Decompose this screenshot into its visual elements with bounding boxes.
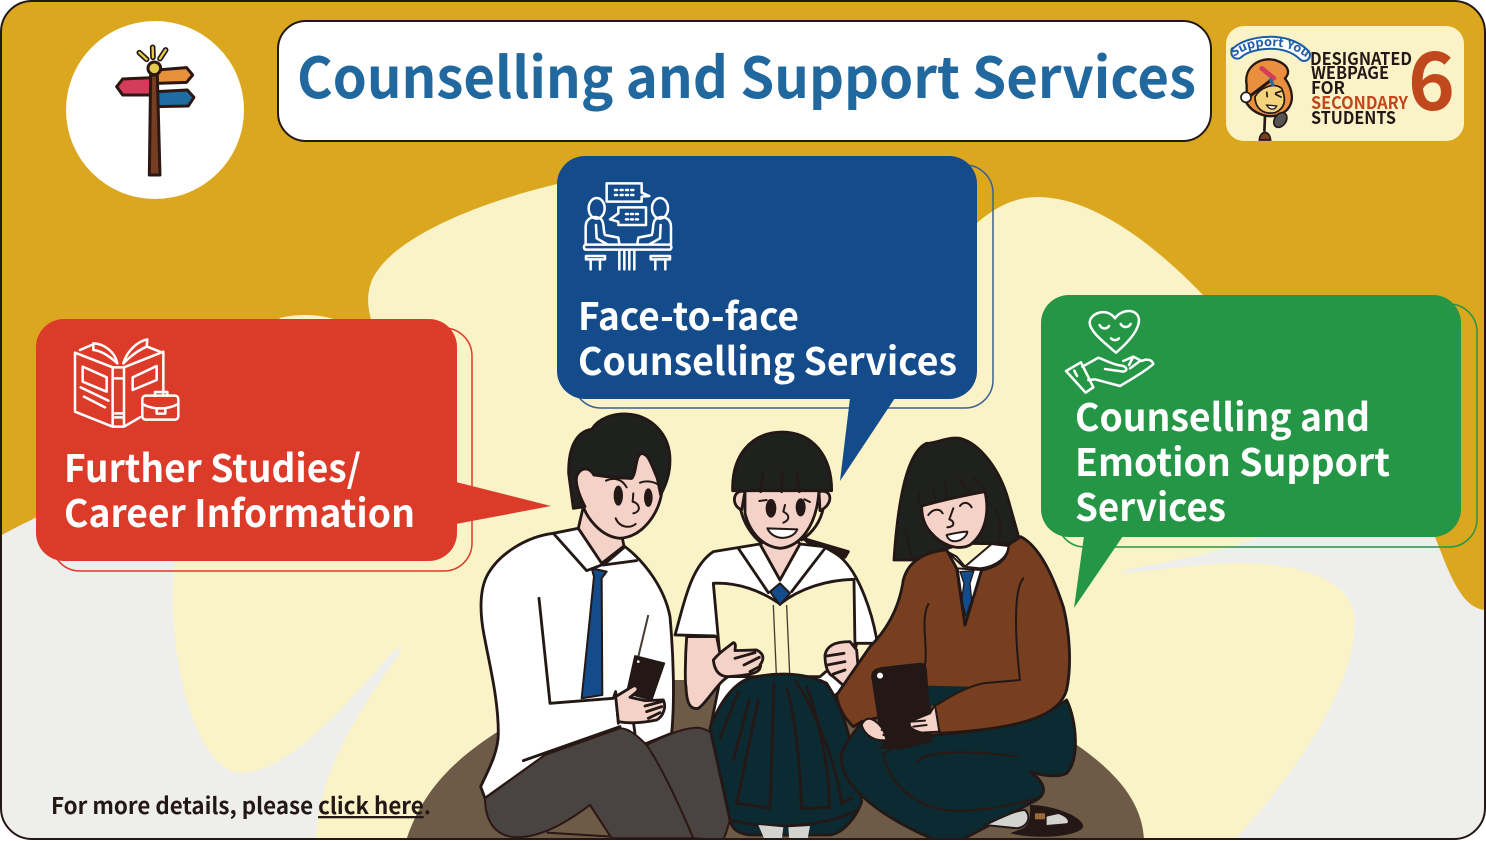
badge: designated webpage for secondary 6 students: SECONDARY bbox=[1311, 90, 1409, 115]
panel: face-to-face counselling: Face-to-face bbox=[578, 286, 799, 341]
footer text with link: For more details, please click here. bbox=[51, 787, 431, 821]
panel: face-to-face counselling bbox=[557, 156, 993, 481]
icon: signpost in white circle bbox=[66, 21, 244, 199]
illustration: three students bbox=[481, 414, 1083, 841]
figure: boy with phone bbox=[481, 414, 734, 840]
icon: heart in open hand bbox=[1066, 311, 1153, 393]
badge: designated webpage for secondary 6 students: FOR bbox=[1311, 75, 1345, 100]
title bbox=[278, 21, 1211, 141]
badge: designated webpage for secondary 6 students: 6 bbox=[1408, 18, 1455, 134]
panel: counselling and emotion support: Emotion Support bbox=[1075, 432, 1390, 487]
figure: girl with tablet bbox=[837, 438, 1083, 841]
panel: face-to-face counselling: Counselling Services bbox=[578, 331, 957, 386]
badge: designated webpage for secondary 6 students: STUDENTS bbox=[1311, 105, 1396, 130]
panel: counselling and emotion support bbox=[1041, 295, 1477, 608]
icon: two people talking at table bbox=[584, 183, 671, 269]
badge: designated webpage for secondary 6 students: DESIGNATED bbox=[1310, 46, 1412, 71]
icon: mascot bbox=[1230, 36, 1311, 141]
icon: mascot: Support You bbox=[1230, 38, 1308, 57]
figure: girl reading book bbox=[675, 432, 877, 841]
panel: counselling and emotion support: Counselling and bbox=[1075, 387, 1370, 442]
panel: further studies and career information bbox=[36, 319, 551, 571]
panel: further studies and career information: Further Studies/ bbox=[64, 438, 361, 493]
icon: book and briefcase bbox=[75, 339, 178, 427]
title: Counselling and Support Services bbox=[297, 33, 1196, 115]
panel: further studies and career information: Career Information bbox=[64, 483, 415, 538]
panel: counselling and emotion support: Services bbox=[1075, 477, 1226, 532]
badge: designated webpage for secondary 6 students: WEBPAGE bbox=[1311, 60, 1389, 85]
badge: designated webpage for secondary 6 students bbox=[1226, 18, 1464, 141]
